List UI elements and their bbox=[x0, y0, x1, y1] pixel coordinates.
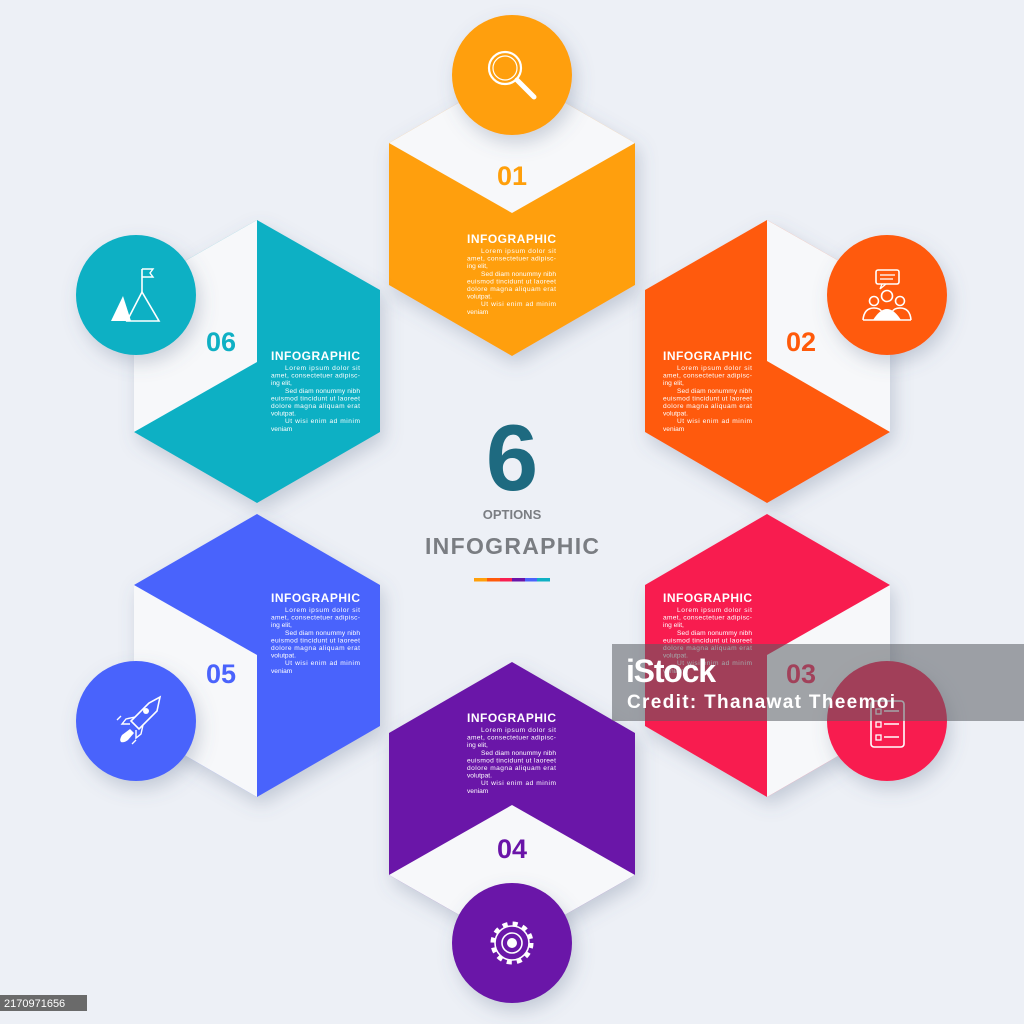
watermark credit bbox=[612, 644, 1024, 721]
text block 03: volutpat. bbox=[663, 653, 688, 660]
text block 02: veniam bbox=[663, 426, 685, 433]
text block 01 bbox=[467, 232, 556, 316]
icon: magnifier circle bbox=[452, 15, 572, 135]
text block 05: INFOGRAPHIC bbox=[271, 591, 360, 605]
text block 02: INFOGRAPHIC bbox=[663, 349, 752, 363]
number 04: 04 bbox=[497, 834, 527, 864]
big number 6: 6 bbox=[486, 405, 538, 510]
text block 01: Ut wisi enim ad minim bbox=[481, 301, 556, 308]
text block 02: volutpat. bbox=[663, 411, 688, 418]
text block 04: amet, consectetuer adipisc- bbox=[467, 735, 556, 742]
text block 05 bbox=[271, 591, 360, 675]
watermark credit: Credit: Thanawat Theemoi bbox=[627, 692, 895, 713]
text block 03: INFOGRAPHIC bbox=[663, 591, 752, 605]
text block 01: ing elit, bbox=[467, 263, 488, 270]
color bar bbox=[474, 578, 550, 582]
text block 02: dolore magna aliquam erat bbox=[663, 403, 752, 410]
text block 06: veniam bbox=[271, 426, 293, 433]
text block 05: dolore magna aliquam erat bbox=[271, 645, 360, 652]
text block 03 bbox=[663, 591, 752, 675]
icon: mountain flag circle bbox=[76, 235, 196, 355]
text block 06: Sed diam nonummy nibh bbox=[285, 388, 360, 395]
text block 06: euismod tincidunt ut laoreet bbox=[271, 395, 360, 402]
center title block bbox=[425, 405, 599, 582]
text block 04: Ut wisi enim ad minim bbox=[481, 780, 556, 787]
text block 02: amet, consectetuer adipisc- bbox=[663, 373, 752, 380]
text block 06: ing elit, bbox=[271, 380, 292, 387]
number 03: 03 bbox=[786, 659, 816, 689]
text block 03: Lorem ipsum dolor sit bbox=[677, 607, 752, 614]
panel: hex 03 bbox=[645, 514, 947, 797]
icon: rocket circle bbox=[76, 661, 196, 781]
text block 05: Ut wisi enim ad minim bbox=[285, 660, 360, 667]
text block 06: amet, consectetuer adipisc- bbox=[271, 373, 360, 380]
panel: hex 04 bbox=[389, 662, 635, 1003]
text block 05: ing elit, bbox=[271, 622, 292, 629]
icon: checklist circle bbox=[827, 661, 947, 781]
text block 06: Ut wisi enim ad minim bbox=[285, 418, 360, 425]
text block 04 bbox=[467, 711, 556, 795]
text block 04: dolore magna aliquam erat bbox=[467, 765, 556, 772]
text block 01: volutpat. bbox=[467, 294, 492, 301]
text block 05: veniam bbox=[271, 668, 293, 675]
number 01: 01 bbox=[497, 161, 527, 191]
text block 04: euismod tincidunt ut laoreet bbox=[467, 757, 556, 764]
text block 03: euismod tincidunt ut laoreet bbox=[663, 637, 752, 644]
text block 04: volutpat. bbox=[467, 773, 492, 780]
text block 05: Sed diam nonummy nibh bbox=[285, 630, 360, 637]
panel: hex 02 bbox=[645, 220, 947, 503]
text block 03: Sed diam nonummy nibh bbox=[677, 630, 752, 637]
watermark credit: iStock bbox=[626, 653, 716, 689]
text block 05: euismod tincidunt ut laoreet bbox=[271, 637, 360, 644]
text block 02: Lorem ipsum dolor sit bbox=[677, 365, 752, 372]
subtitle options: OPTIONS bbox=[483, 507, 542, 522]
text block 01: euismod tincidunt ut laoreet bbox=[467, 278, 556, 285]
number 02: 02 bbox=[786, 327, 816, 357]
text block 05: volutpat. bbox=[271, 653, 296, 660]
text block 03: Ut wisi enim ad minim bbox=[677, 660, 752, 667]
text block 04: Sed diam nonummy nibh bbox=[481, 750, 556, 757]
text block 06 bbox=[271, 349, 360, 433]
text block 02: Sed diam nonummy nibh bbox=[677, 388, 752, 395]
panel: hex 05 bbox=[76, 514, 380, 797]
number 05: 05 bbox=[206, 659, 236, 689]
text block 03: dolore magna aliquam erat bbox=[663, 645, 752, 652]
icon: team circle bbox=[827, 235, 947, 355]
text block 01: Sed diam nonummy nibh bbox=[481, 271, 556, 278]
text block 02: ing elit, bbox=[663, 380, 684, 387]
number 06: 06 bbox=[206, 327, 236, 357]
text block 06: Lorem ipsum dolor sit bbox=[285, 365, 360, 372]
panel: hex 06 bbox=[76, 220, 380, 503]
text block 04: ing elit, bbox=[467, 742, 488, 749]
text block 02: Ut wisi enim ad minim bbox=[677, 418, 752, 425]
text block 06: INFOGRAPHIC bbox=[271, 349, 360, 363]
icon: gear circle bbox=[452, 883, 572, 1003]
image id tag bbox=[0, 995, 87, 1011]
panel: hex 01 bbox=[389, 15, 635, 356]
text block 02: euismod tincidunt ut laoreet bbox=[663, 395, 752, 402]
text block 01: INFOGRAPHIC bbox=[467, 232, 556, 246]
text block 03: ing elit, bbox=[663, 622, 684, 629]
text block 01: Lorem ipsum dolor sit bbox=[481, 248, 556, 255]
text block 01: dolore magna aliquam erat bbox=[467, 286, 556, 293]
text block 01: veniam bbox=[467, 309, 489, 316]
text block 02 bbox=[663, 349, 752, 433]
image id tag: 2170971656 bbox=[4, 998, 65, 1010]
text block 01: amet, consectetuer adipisc- bbox=[467, 256, 556, 263]
text block 05: Lorem ipsum dolor sit bbox=[285, 607, 360, 614]
subtitle infographic: INFOGRAPHIC bbox=[425, 533, 599, 559]
text block 03: veniam bbox=[663, 668, 685, 675]
text block 05: amet, consectetuer adipisc- bbox=[271, 615, 360, 622]
text block 04: Lorem ipsum dolor sit bbox=[481, 727, 556, 734]
text block 06: dolore magna aliquam erat bbox=[271, 403, 360, 410]
text block 06: volutpat. bbox=[271, 411, 296, 418]
text block 03: amet, consectetuer adipisc- bbox=[663, 615, 752, 622]
text block 04: veniam bbox=[467, 788, 489, 795]
text block 04: INFOGRAPHIC bbox=[467, 711, 556, 725]
